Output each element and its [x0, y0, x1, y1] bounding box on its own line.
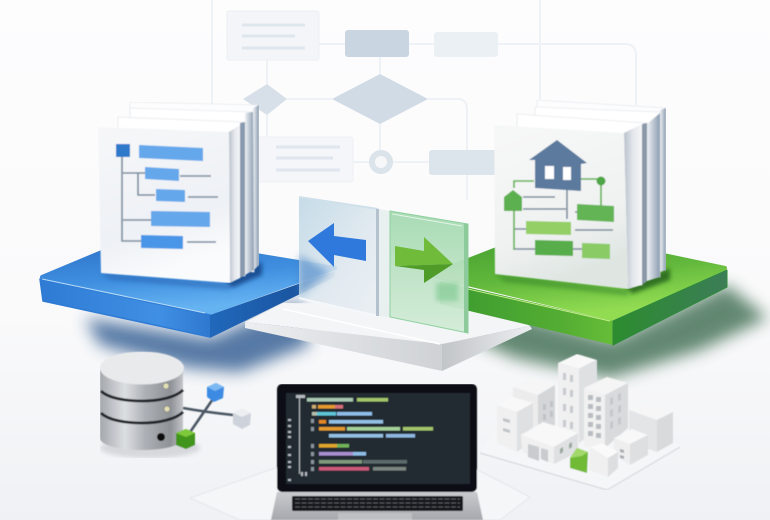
panel: legacy document stack with tree diagram: [98, 102, 259, 283]
node connectors: [183, 396, 233, 438]
glass panel: blue arrow: [299, 197, 379, 316]
building: small right: [614, 429, 648, 465]
platform right side: [613, 270, 727, 345]
tree node bars: [139, 145, 210, 249]
document contact shadows: [101, 262, 670, 296]
city base plate: [480, 400, 680, 490]
cube: blue: [207, 383, 224, 402]
code lines: [307, 398, 433, 471]
disk gaps: [101, 390, 183, 423]
building: tall tower: [558, 354, 597, 443]
floor shadows: [85, 285, 768, 378]
tree connectors: [122, 156, 218, 242]
building: left box: [497, 397, 533, 452]
building: far right: [629, 405, 673, 452]
flowchart diamond: large: [332, 74, 428, 124]
cylinder body: [100, 368, 183, 450]
cube: white: [233, 409, 251, 429]
platform right side: [210, 271, 335, 338]
glass panel: green arrow: [390, 211, 468, 333]
laptop base: [271, 492, 483, 520]
diagram connectors: [514, 190, 613, 249]
root node: [116, 144, 130, 157]
arrow: left: [308, 223, 366, 267]
green bars: [526, 204, 614, 259]
back pages: [517, 100, 666, 289]
background flowchart: [212, 0, 636, 200]
white base plinth: [245, 303, 532, 371]
glass seam: [379, 209, 390, 317]
front page: [98, 127, 230, 283]
flowchart box: dark top: [345, 30, 409, 57]
flowchart box: lower right: [429, 150, 499, 175]
icon: city model: [480, 354, 680, 490]
status lights: [163, 383, 170, 412]
building: white cube: [589, 443, 618, 477]
building: low garage: [521, 422, 578, 464]
flowchart box: top left: [227, 11, 319, 60]
platform front side: [40, 279, 210, 337]
desk mat: [190, 468, 530, 520]
laptop: [190, 384, 530, 520]
code editor: [286, 393, 470, 484]
port: [157, 433, 165, 441]
platform top: [430, 230, 725, 319]
panel: blue platform: [40, 236, 335, 338]
panel: green platform: [430, 230, 727, 345]
laptop screen bezel: [277, 384, 477, 492]
building: back left: [513, 378, 555, 430]
code gutter: [288, 395, 307, 481]
icon: database with nodes: [100, 352, 251, 458]
panel: target document stack with house diagram: [494, 100, 666, 289]
flowchart diamond: small: [243, 84, 287, 115]
front page: [494, 125, 628, 289]
keyboard: [292, 496, 463, 511]
arrow: right: [395, 237, 453, 283]
flowchart box: lower left: [258, 137, 353, 182]
back pages: [118, 102, 259, 283]
platform front side: [440, 281, 613, 345]
cube: green: [176, 429, 195, 449]
green round node: [596, 176, 606, 186]
cylinder top: [100, 352, 184, 384]
platform top: [42, 236, 335, 313]
house icon: [529, 140, 587, 191]
green house node: [504, 190, 522, 211]
building: office block: [584, 377, 628, 448]
building: green block: [570, 448, 588, 473]
trackpad: [338, 513, 412, 520]
flowchart box: pale top: [434, 32, 498, 57]
flowchart ring node: [372, 153, 390, 171]
